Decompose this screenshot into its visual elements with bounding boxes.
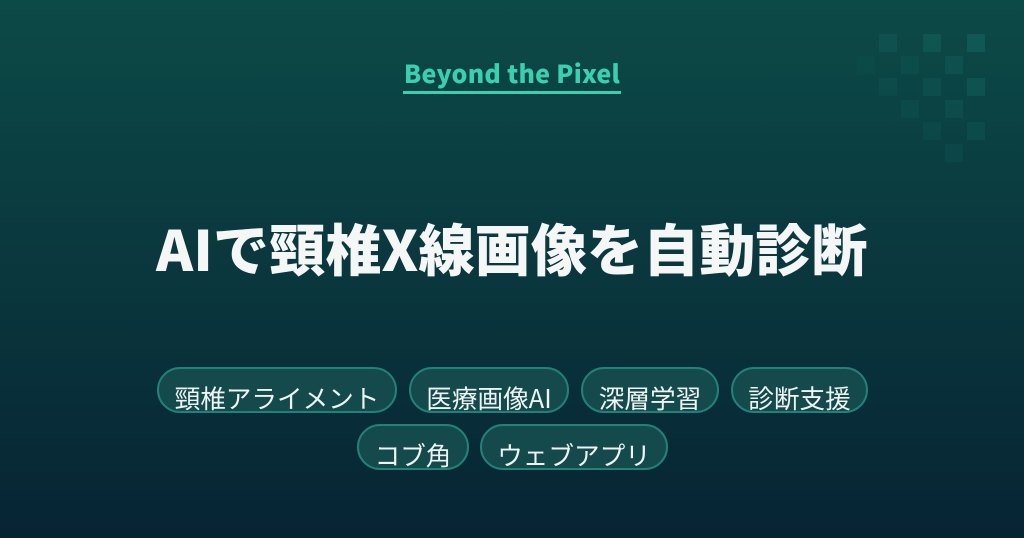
- title: AIで頸椎X線画像を自動診断: [156, 207, 868, 288]
- tag: 医療画像AI: 医療画像AI: [426, 378, 552, 416]
- tag: 頸椎アライメント: [157, 367, 397, 413]
- tag: 頸椎アライメント: 頸椎アライメント: [175, 378, 379, 416]
- tag: 医療画像AI: [409, 367, 569, 413]
- tag: 深層学習: 深層学習: [599, 378, 701, 416]
- tag: 診断支援: 診断支援: [748, 378, 851, 416]
- tag: コブ角: コブ角: [375, 436, 451, 472]
- tag: ウェブアプリ: [480, 424, 668, 470]
- brand heading: Beyond the Pixel: [404, 55, 620, 91]
- tag: 診断支援: [731, 367, 868, 413]
- tag: 深層学習: [581, 367, 719, 413]
- tags: [157, 367, 868, 472]
- tag: ウェブアプリ: ウェブアプリ: [497, 436, 651, 472]
- decorative pixel grid: [879, 34, 985, 140]
- tag: コブ角: [357, 424, 469, 470]
